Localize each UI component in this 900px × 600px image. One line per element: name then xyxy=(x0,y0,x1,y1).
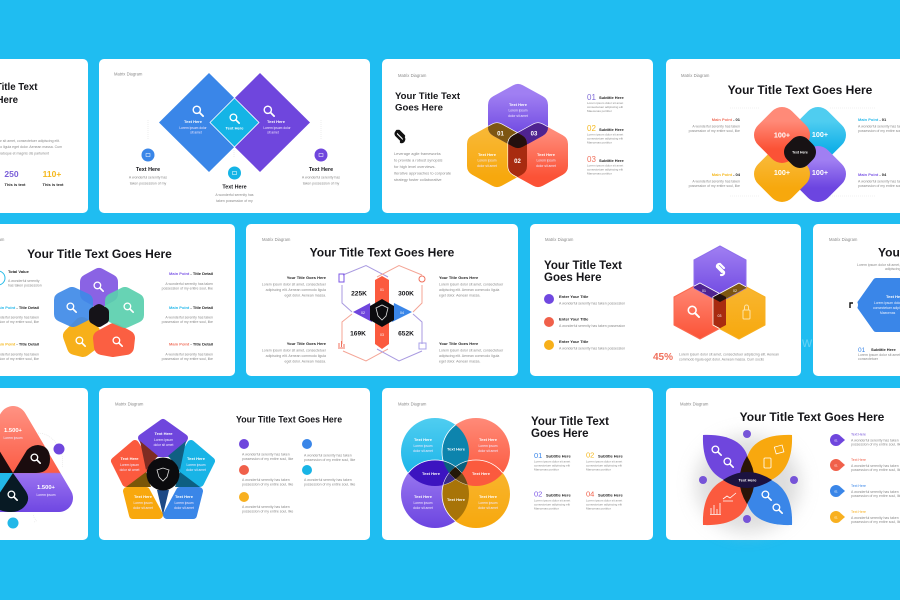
panel: overlapping diamonds xyxy=(99,59,370,213)
icon list: A wonderful serenity has taken xyxy=(304,454,352,458)
text blocks: Lorem ipsum dolor sit amet, consectetuer xyxy=(262,348,327,352)
title: Your Title Text xyxy=(531,416,609,428)
list items: consectetuer adipiscing elit xyxy=(534,502,570,506)
rounded triangle: Lorem ipsum xyxy=(36,493,56,497)
venn labels: dolor sit amet xyxy=(478,449,498,453)
venn labels: Text Here xyxy=(479,494,498,499)
rounded diamonds: 100+ xyxy=(812,130,828,139)
rounded triangle: 1.500+ xyxy=(4,428,23,434)
list item 01: Subtitle Here xyxy=(871,347,896,352)
list items: consectetuer adipiscing elit xyxy=(534,464,570,468)
icon list: A wonderful serenity has taken xyxy=(242,478,290,482)
callout: right: A wonderful serenity has xyxy=(302,176,340,180)
text blocks: Your Title Goes Here xyxy=(287,275,327,280)
stat: 45%: 45% xyxy=(653,352,673,363)
right labels: Main Point - Title Detail xyxy=(169,271,213,276)
main point 01 left: possession of my entire soul, like xyxy=(689,129,740,133)
list items xyxy=(544,294,625,350)
panel: petal diagram xyxy=(0,224,235,376)
callout: centre xyxy=(215,166,254,203)
venn labels: Text Here xyxy=(414,437,433,442)
title xyxy=(0,82,38,106)
callout: left: taken possession of my xyxy=(130,182,167,186)
title: Your Title Text Goes Here xyxy=(740,410,885,424)
text blocks: eget dolor. Aenean massa. xyxy=(285,294,326,298)
right labels: A wonderful serenity has taken xyxy=(165,316,213,320)
callout: centre: A wonderful serenity has xyxy=(215,193,254,197)
title xyxy=(544,260,622,284)
main point 04 left: Main Point - 04 xyxy=(712,172,741,177)
list item 01 xyxy=(858,347,900,361)
icon: chain link xyxy=(396,131,404,142)
body text: strategy foster collaborative xyxy=(394,177,442,182)
list item 01: Lorem ipsum dolor sit amet xyxy=(858,353,900,357)
list items: A wonderful serenity has taken possession xyxy=(559,302,625,306)
list items: A wonderful serenity has taken possession xyxy=(559,346,625,350)
title: Your Title Text Goes Here xyxy=(236,414,342,424)
list markers and text: 01 xyxy=(834,490,838,494)
list item 01: Maecenas porttitor xyxy=(587,109,612,113)
main point 04 left xyxy=(689,172,741,188)
values: 652K xyxy=(398,330,414,338)
hexagon venn: 01 xyxy=(497,132,504,138)
venn labels: dolor sit amet xyxy=(478,506,498,510)
panel: rounded squares xyxy=(666,59,900,213)
segment labels: Text Here xyxy=(175,494,194,499)
body text xyxy=(0,139,62,156)
segment labels: dolor sit amet xyxy=(120,468,139,472)
stat: 110+: 110+ xyxy=(43,169,61,179)
hexagon venn: Text Here xyxy=(478,152,497,157)
panel: hexagon outline diagram xyxy=(246,224,518,376)
title: Your Title Text Goes Here xyxy=(310,246,455,260)
segment labels: Text Here xyxy=(134,494,153,499)
values: 300K xyxy=(398,290,414,298)
list items xyxy=(534,450,623,510)
panel: three hexagons with icons xyxy=(530,224,801,376)
list items: 01 xyxy=(534,451,542,460)
diamond: teal centre: Text Here xyxy=(226,126,244,130)
title: Goes Here xyxy=(544,272,602,284)
hexagon venn: 02 xyxy=(733,289,737,293)
segment labels: dolor sit amet xyxy=(174,506,194,510)
body text xyxy=(394,151,451,182)
values: 225K xyxy=(351,290,367,298)
venn labels: Text Here xyxy=(414,494,433,499)
panel: four circle venn: Matrix Diagram xyxy=(398,402,427,406)
list item 01 xyxy=(587,93,624,113)
diamond: blue xyxy=(159,73,259,172)
diamond: blue: sit amet xyxy=(190,130,202,134)
icon list: possession of my entire soul, like xyxy=(304,482,355,486)
watermark letter: w xyxy=(801,334,813,350)
list markers and text: Text Here xyxy=(851,510,866,514)
icon list: possession of my entire soul, like xyxy=(242,510,293,514)
list items: Lorem ipsum dolor sit amet xyxy=(534,498,570,502)
list items: Enter Your Title xyxy=(559,339,589,344)
panel: row 2 cropped slide xyxy=(813,224,900,376)
leaves xyxy=(703,435,792,525)
rounded diamonds xyxy=(768,121,832,188)
main point 01 right xyxy=(858,117,900,133)
list items: Subtitle Here xyxy=(546,454,571,458)
list items: 02 xyxy=(586,450,594,460)
panel: row 1 cropped slide xyxy=(0,59,88,213)
panel: three hexagons xyxy=(382,59,653,213)
title xyxy=(395,91,461,114)
main point 04 left: A wonderful serenity has taken xyxy=(692,180,740,184)
main point 04 left: possession of my entire soul, like xyxy=(689,184,740,188)
right labels: A wonderful serenity has taken xyxy=(165,282,213,286)
text blocks xyxy=(262,275,504,364)
text blocks: adipiscing elit. Aenean commodo ligula xyxy=(266,288,326,292)
hexagon venn: Lorem ipsum xyxy=(477,158,497,162)
panel: four circle venn xyxy=(382,388,653,540)
hexagon venn xyxy=(477,94,558,177)
body text: Leverage agile frameworks xyxy=(394,151,441,156)
total value: has taken possession xyxy=(8,284,42,288)
callout: left: Text Here xyxy=(136,167,160,173)
list items: consectetuer adipiscing elit xyxy=(586,502,622,506)
rounded diamonds: 100+ xyxy=(774,130,790,140)
icon list: A wonderful serenity has taken xyxy=(242,452,290,456)
list markers and text: A wonderful serenity has taken xyxy=(851,464,899,468)
list markers and text: A wonderful serenity has taken xyxy=(851,438,899,442)
panel: pentagon diagram: Matrix Diagram xyxy=(115,402,144,406)
venn labels: dolor sit amet xyxy=(413,506,433,510)
list item 03: Subtitle Here xyxy=(599,158,624,163)
right labels: A wonderful serenity has taken xyxy=(165,352,213,356)
stat: 45%: commodo ligula eget dolor. Aenean massa. Cum sociis xyxy=(679,358,764,362)
venn labels: dolor sit amet xyxy=(413,449,433,453)
right labels: possession of my entire soul, like xyxy=(162,320,213,324)
list item 01: consectetuer adipiscing elit xyxy=(587,105,623,109)
callout: right: Text Here xyxy=(309,167,333,173)
petals xyxy=(62,276,136,349)
list items: 02 xyxy=(534,490,542,498)
venn labels: Text Here xyxy=(472,471,491,476)
venn labels xyxy=(413,437,498,510)
callout: centre: taken possession of my xyxy=(216,199,253,203)
icon list: possession of my entire soul, like xyxy=(242,457,293,461)
list items: Maecenas porttitor xyxy=(586,506,611,510)
list markers and text: Text Here xyxy=(851,458,866,462)
main point 04 right: Main Point - 04 xyxy=(858,172,887,177)
body text: for high level overviews. xyxy=(394,164,436,169)
callout: left xyxy=(129,148,167,186)
centre bar and hexagon: 04 xyxy=(400,311,404,315)
list item 03: consectetuer adipiscing elit xyxy=(587,168,623,172)
left labels xyxy=(0,305,39,361)
text blocks: Lorem ipsum dolor sit amet, consectetuer xyxy=(439,282,504,286)
list items: Enter Your Title xyxy=(559,294,589,299)
hexagon venn: dolor sit amet xyxy=(508,114,528,118)
stat: 110+ xyxy=(43,169,64,187)
text blocks: adipiscing elit. Aenean commodo ligula xyxy=(266,354,326,358)
right labels: possession of my entire soul, like xyxy=(162,357,213,361)
list markers and text: 01 xyxy=(834,516,838,520)
list markers and text xyxy=(830,432,900,524)
segment labels: Lorem ipsum xyxy=(133,501,153,505)
corner icons xyxy=(338,274,426,349)
list items: Subtitle Here xyxy=(598,492,623,498)
hexagon venn: 03 xyxy=(718,314,721,318)
list items: Maecenas porttitor xyxy=(586,468,611,472)
outline hexagons xyxy=(342,266,422,361)
title: Your Title Text Goes Here xyxy=(728,83,873,97)
list item 02: Lorem ipsum dolor sit amet xyxy=(587,132,623,136)
title: Goes Here xyxy=(531,428,589,440)
stat: 250: This is text xyxy=(5,182,26,187)
list items: Lorem ipsum dolor sit amet xyxy=(534,460,570,464)
panel: pentagon diagram xyxy=(99,388,370,540)
list item 01: 01 xyxy=(858,347,866,354)
venn labels: Lorem ipsum xyxy=(413,501,433,505)
rounded triangle xyxy=(0,420,59,512)
text blocks: adipiscing elit. Aenean commodo ligula xyxy=(439,288,499,292)
rounded diamonds: 100+ xyxy=(774,168,790,177)
stat: 110+: This is text xyxy=(43,182,64,187)
list item 03: Lorem ipsum dolor sit amet xyxy=(587,164,623,168)
text blocks: adipiscing elit. Aenean commodo ligula xyxy=(439,354,499,358)
icon: white circle xyxy=(846,299,858,311)
right labels xyxy=(162,271,213,361)
list item 02: Maecenas porttitor xyxy=(587,140,612,144)
venn labels: Lorem ipsum xyxy=(478,501,498,505)
panel: four leaf diagram xyxy=(666,388,900,540)
list item 01: 01 xyxy=(587,93,596,102)
list item 03 xyxy=(587,155,624,176)
diamond: blue: Text Here xyxy=(184,119,203,124)
list items: Maecenas porttitor xyxy=(534,468,559,472)
hexagon venn: Text Here xyxy=(509,102,528,107)
centre bar and hexagon: 02 xyxy=(361,311,365,315)
stat: 250 xyxy=(4,169,26,187)
panel: hexagon outline diagram: Matrix Diagram xyxy=(262,237,291,242)
segment labels: Text Here xyxy=(155,431,173,436)
venn labels: Text Here xyxy=(447,497,466,502)
venn labels: Text Here xyxy=(479,437,498,442)
list item 02: consectetuer adipiscing elit xyxy=(587,136,623,140)
title: Your Title Text xyxy=(544,260,622,272)
panel: triangle diagram xyxy=(0,388,88,540)
panel: three hexagons with icons: Matrix Diagram xyxy=(545,237,574,242)
panel: overlapping diamonds: Matrix Diagram xyxy=(114,72,143,76)
rounded triangle: 1.500+ xyxy=(37,485,56,491)
icon list: A wonderful serenity has taken xyxy=(304,478,352,482)
list items: A wonderful serenity has taken possession xyxy=(559,324,625,328)
list items: 04 xyxy=(586,490,594,498)
title xyxy=(531,416,609,440)
list items: Maecenas porttitor xyxy=(534,506,559,510)
outer markers xyxy=(699,430,798,523)
text blocks: Your Title Goes Here xyxy=(439,275,479,280)
soft shadow xyxy=(696,436,800,532)
diamond: purple: Lorem ipsum dolor xyxy=(263,126,292,130)
segment labels: Lorem ipsum xyxy=(154,438,173,442)
icon list: possession of my entire soul, like xyxy=(242,482,293,486)
rounded triangle: Lorem ipsum xyxy=(3,436,23,440)
list markers and text: Text Here xyxy=(851,484,866,488)
markers xyxy=(8,444,64,528)
title: Your Title Text xyxy=(395,91,461,102)
diamond: teal centre xyxy=(210,98,259,147)
segment labels: Text Here xyxy=(187,456,206,461)
panel: four leaf diagram: Matrix Diagram xyxy=(680,402,709,406)
list items: Lorem ipsum dolor sit amet xyxy=(586,460,622,464)
text blocks: Your Title Goes Here xyxy=(287,341,327,346)
stat: 45%: Lorem ipsum dolor sit amet, consectetuer adipiscing elit. Aenean xyxy=(679,352,779,356)
body text: Iterative approaches to corporate xyxy=(394,170,451,176)
panel: row 2 cropped slide: Matrix Diagram xyxy=(829,237,858,242)
main point 01 left xyxy=(689,117,741,133)
stat: 45% xyxy=(653,352,779,363)
stat: 250: 250 xyxy=(4,169,19,179)
right labels: Main Point - Title Detail xyxy=(169,305,213,310)
hexagon: blue: Maecenas xyxy=(880,311,896,315)
rounded diamonds: 100+ xyxy=(812,168,828,177)
list item 02: 02 xyxy=(587,124,596,133)
hexagon venn: 01 xyxy=(702,289,706,293)
text blocks: Your Title Goes Here xyxy=(439,341,479,346)
list item 01: Subtitle Here xyxy=(599,95,624,100)
list items: consectetuer adipiscing elit xyxy=(586,464,622,468)
values xyxy=(350,290,414,338)
icon list xyxy=(239,439,355,514)
right labels: Main Point - Title Detail xyxy=(169,342,213,346)
rounded diamonds: Text Here xyxy=(792,150,808,154)
segment labels: Lorem ipsum xyxy=(120,463,139,467)
venn labels: Lorem ipsum xyxy=(413,444,433,448)
main point 01 left: A wonderful serenity has taken xyxy=(692,124,740,128)
values: 169K xyxy=(350,330,366,338)
body text: to provide a robust synopsis xyxy=(394,158,442,162)
hexagon venn xyxy=(674,246,765,339)
segment labels: dolor sit amet xyxy=(186,468,206,472)
leaves: Text Here xyxy=(739,478,757,482)
list markers and text: 01 xyxy=(834,438,838,442)
main point 04 right xyxy=(858,172,900,188)
segment labels: Lorem ipsum xyxy=(174,501,194,505)
text blocks: eget dolor. Aenean massa. xyxy=(285,360,326,364)
list items: Subtitle Here xyxy=(598,454,623,458)
panel: rounded squares: Matrix Diagram xyxy=(681,73,710,78)
hexagon venn: Lorem ipsum xyxy=(508,108,528,112)
venn circles xyxy=(401,418,510,528)
list item 03: Maecenas porttitor xyxy=(587,172,612,176)
list markers and text: Text Here xyxy=(851,432,866,436)
segment labels: Text Here xyxy=(121,456,139,461)
panel: three hexagons: Matrix Diagram xyxy=(398,73,427,78)
segment labels: dolor sit amet xyxy=(154,443,173,447)
text blocks: Lorem ipsum dolor sit amet, consectetuer xyxy=(262,282,327,286)
total value: Total Value xyxy=(8,269,30,274)
magnifier icons xyxy=(67,282,133,346)
hexagon venn: Text Here xyxy=(537,152,556,157)
hexagon venn: 02 xyxy=(514,159,521,165)
segment labels: Lorem ipsum xyxy=(186,463,206,467)
list items: Enter Your Title xyxy=(559,316,589,322)
hexagon venn: dolor sit amet xyxy=(477,164,497,168)
list markers and text: A wonderful serenity has taken xyxy=(851,490,899,494)
venn labels: Text Here xyxy=(422,471,441,476)
title: Goes Here xyxy=(395,102,443,114)
list item 01: Lorem ipsum dolor sit amet xyxy=(587,101,623,105)
centre bar and hexagon: 03 xyxy=(380,333,384,337)
icon list: A wonderful serenity has taken xyxy=(242,505,290,509)
text blocks: eget dolor. Aenean massa. xyxy=(439,294,480,298)
centre circle xyxy=(146,458,180,490)
diamond: blue: Lorem ipsum dolor xyxy=(179,126,208,130)
list items: Lorem ipsum dolor sit amet xyxy=(586,498,622,502)
diamond: purple: Text Here xyxy=(267,119,286,124)
hexagon venn: dolor sit amet xyxy=(536,164,556,168)
callout: right xyxy=(302,148,340,186)
icon list: possession of my entire soul, like xyxy=(304,458,355,462)
centre bar and hexagon xyxy=(353,276,412,349)
list markers and text: A wonderful serenity has taken xyxy=(851,516,899,520)
list item 03: 03 xyxy=(587,155,596,164)
diamond: purple: sit amet xyxy=(267,130,279,134)
venn labels: Text Here xyxy=(447,446,466,452)
callout: centre: Text Here xyxy=(222,184,247,190)
main point 01 right: Main Point - 01 xyxy=(858,117,887,122)
hexagon venn: 03 xyxy=(531,132,538,138)
total value: A wonderful serenity xyxy=(8,279,40,283)
main point 01 left: Main Point - 01 xyxy=(712,117,741,122)
segment labels xyxy=(120,431,206,510)
diamond: purple xyxy=(210,73,310,172)
title: Your Title Text Goes Here xyxy=(27,247,172,261)
list markers and text: 01 xyxy=(834,464,838,468)
list item 02: Subtitle Here xyxy=(599,127,624,132)
callout: left: A wonderful serenity has xyxy=(129,176,167,180)
text blocks: eget dolor. Aenean massa. xyxy=(439,360,480,364)
list items: Subtitle Here xyxy=(546,492,571,498)
hexagon: blue xyxy=(859,281,900,329)
segment labels: dolor sit amet xyxy=(133,506,153,510)
list item 02 xyxy=(587,124,624,144)
pentagon segments xyxy=(115,423,211,515)
centre bar and hexagon: 01 xyxy=(380,288,384,292)
total value xyxy=(0,269,42,288)
callout: right: taken possession of my xyxy=(303,182,340,186)
text blocks: Lorem ipsum dolor sit amet, consectetuer xyxy=(439,348,504,352)
hexagon venn: Lorem ipsum xyxy=(536,158,556,162)
right labels: possession of my entire soul, like xyxy=(162,286,213,290)
list item 01: consectetuer xyxy=(858,357,879,361)
venn labels: Lorem ipsum xyxy=(478,444,498,448)
